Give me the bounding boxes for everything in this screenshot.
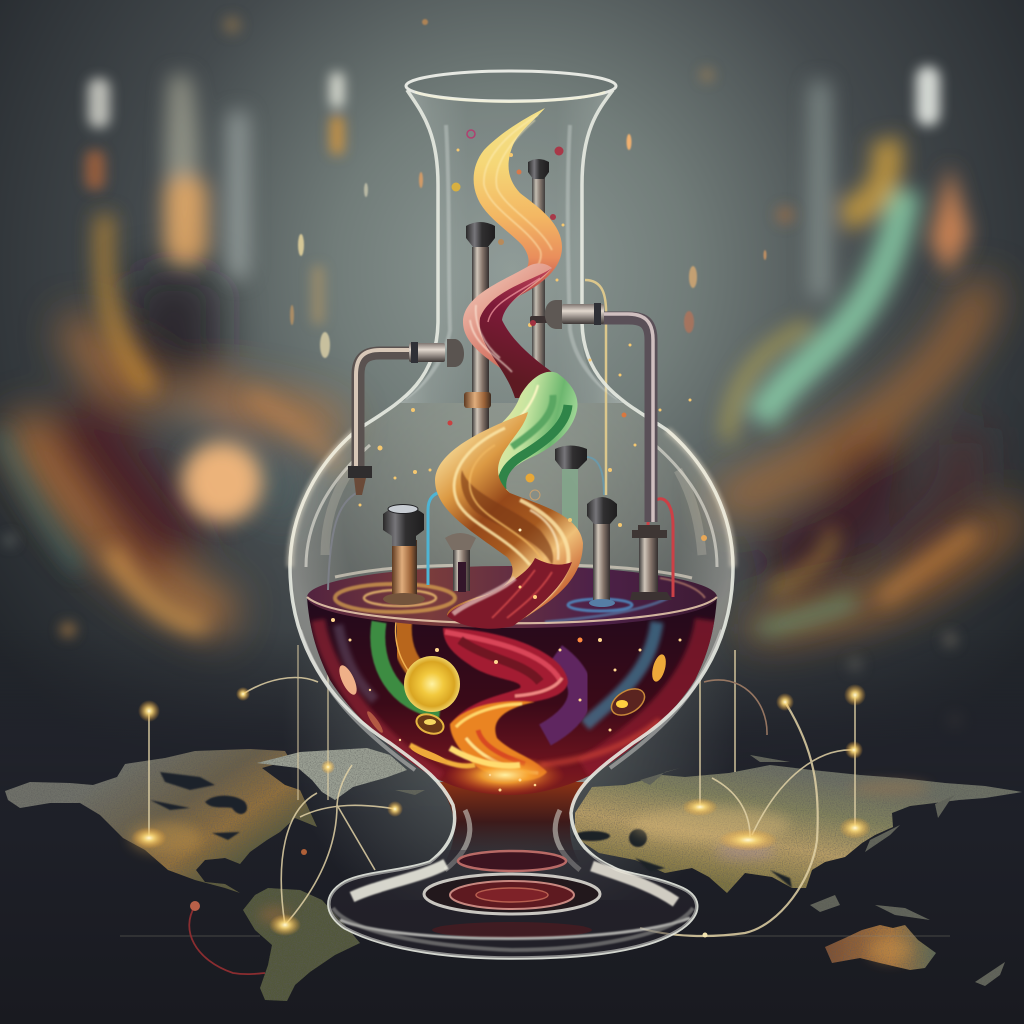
- flask stem: [445, 810, 580, 870]
- base highlights: [333, 864, 693, 950]
- ribbon: green: [470, 372, 578, 493]
- glowing orb: [404, 656, 460, 712]
- blue tube: [428, 492, 442, 585]
- far right valve column: [630, 525, 672, 600]
- world map: [5, 748, 1022, 1001]
- continent: Australia: [825, 925, 936, 970]
- stem interior: [436, 782, 588, 862]
- liquid surface: [307, 565, 717, 628]
- bulb reflection: [306, 445, 717, 567]
- glowing base of liquid: [448, 756, 562, 794]
- ribbon: crimson and pink: [463, 263, 562, 405]
- purple stream: [545, 655, 580, 735]
- blurred background bokeh: [0, 16, 1020, 731]
- ribbon: gold: [435, 412, 583, 628]
- map glow patches: [129, 781, 930, 962]
- Hudson Bay and lakes: [150, 772, 247, 840]
- side red reflections: [318, 620, 708, 778]
- continent: North America: [5, 749, 317, 893]
- external left pipe: [348, 339, 464, 495]
- green stream: [378, 622, 440, 711]
- continent: Greenland: [257, 748, 407, 800]
- orange stream: [402, 622, 425, 680]
- swirling ribbon: [435, 108, 583, 629]
- flask outline: [290, 90, 733, 958]
- blue stream: [585, 622, 657, 725]
- outer soft glow: [290, 430, 733, 567]
- ribbon: yellow top: [474, 108, 562, 297]
- grey curved tube: [328, 490, 362, 590]
- flask base: [329, 850, 697, 958]
- oval bubbles: [336, 653, 668, 766]
- ribbon: red base: [447, 558, 572, 629]
- floating sparks: [358, 130, 707, 599]
- thin copper tube right: [585, 280, 606, 495]
- external right pipe: [545, 300, 653, 522]
- flask bulb glass fill: [290, 403, 733, 805]
- front left valve: [383, 504, 425, 605]
- middle short valve: [445, 533, 476, 592]
- tall valve back right: [528, 159, 549, 368]
- floor shading: [0, 600, 1024, 1024]
- tall valve centre: [464, 222, 495, 502]
- flask glass: [290, 71, 733, 958]
- fire stream: [450, 701, 547, 781]
- red tube: [648, 499, 673, 597]
- flask neck glass fill: [400, 90, 624, 403]
- equator line: [120, 935, 950, 937]
- island shapes: [395, 755, 1005, 986]
- back right green valve: [555, 446, 604, 542]
- crimson stream: [443, 628, 568, 726]
- continent: South America: [243, 888, 360, 1001]
- flask rim: [406, 71, 616, 101]
- speckles: [331, 618, 682, 792]
- neck highlights: [405, 125, 618, 398]
- continent: Eurasia: [575, 765, 1022, 893]
- seas on Eurasia: [574, 829, 792, 888]
- connection lines and glowing nodes: [131, 645, 871, 974]
- inner pipes and valves: [328, 159, 673, 607]
- liquid: [307, 598, 717, 795]
- front right valve: [587, 497, 617, 607]
